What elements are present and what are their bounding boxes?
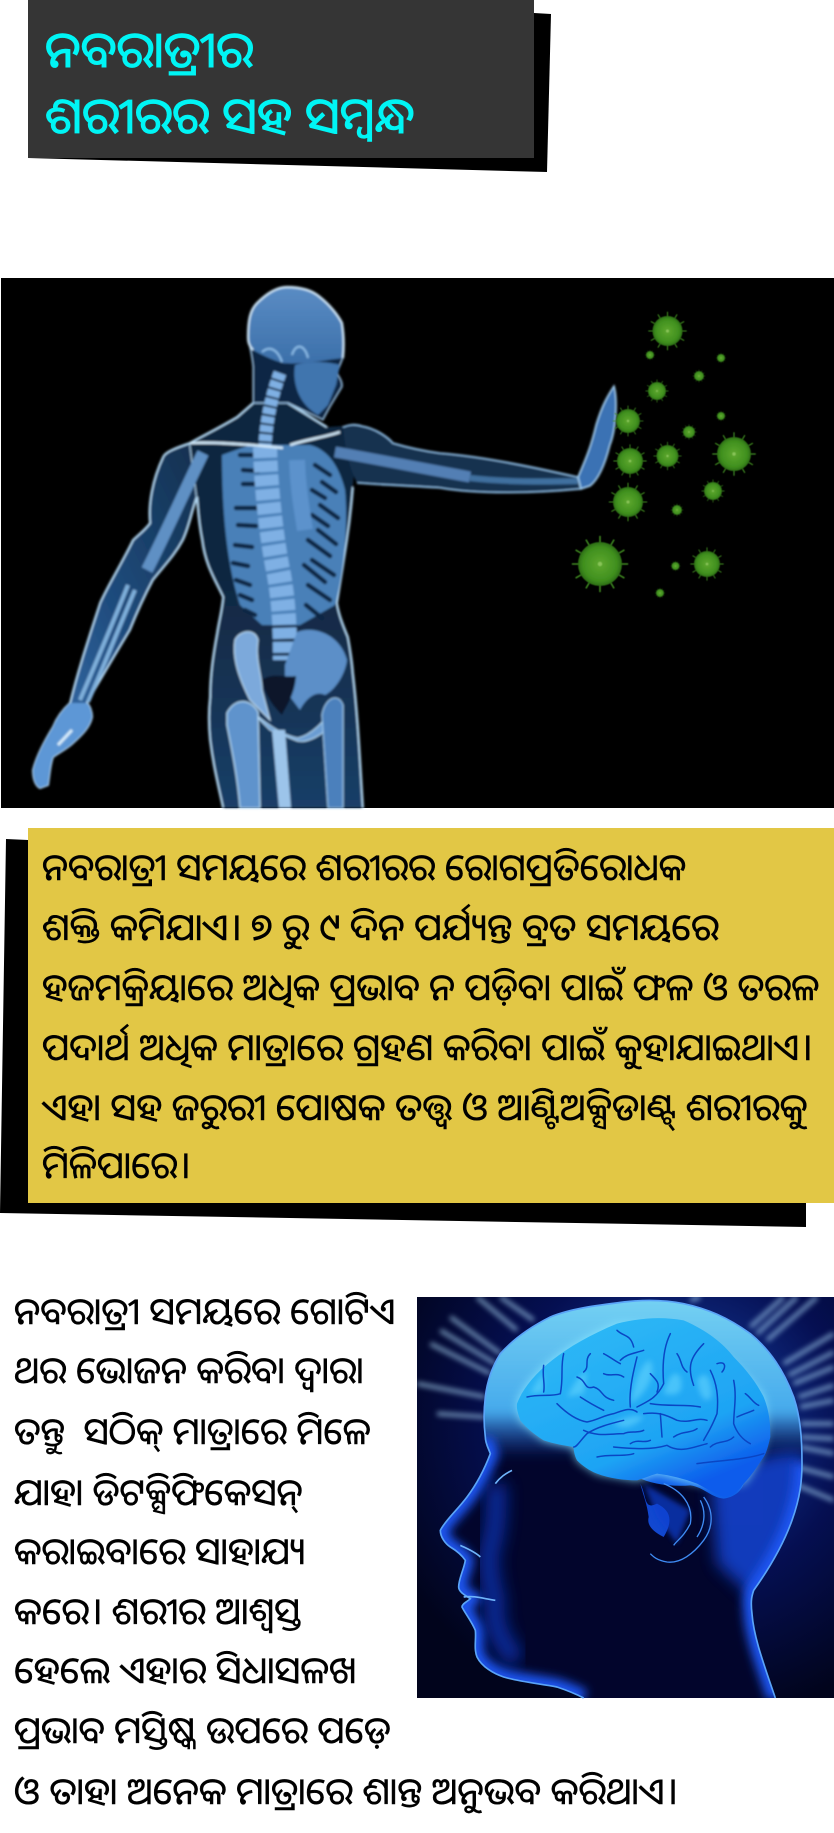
rib cage [222, 445, 346, 625]
body text with brain wrap: ଯାହା ଡିଟକ୍ସିଫିକେସନ୍ [14, 1466, 303, 1516]
viruses [572, 312, 756, 598]
panel text: ମିଳିପାରେ। [42, 1139, 190, 1189]
brain [517, 1318, 770, 1497]
body text with brain wrap: ହେଲେ ଏହାର ସିଧାସଳଖ [14, 1643, 357, 1694]
right arm outline [343, 425, 581, 493]
raised hand [578, 386, 616, 489]
lip and eye lines [460, 1470, 512, 1600]
title text [45, 14, 415, 148]
panel text: ପଦାର୍ଥ ଅଧିକ ମାତ୍ରାରେ ଗ୍ରହଣ କରିବା ପାଇଁ କୁହାଯାଇଥାଏ। [42, 1021, 812, 1071]
panel: yellow text callout [0, 828, 834, 1227]
title banner background [28, 0, 534, 158]
cheek glow [489, 1484, 517, 1660]
body text with brain wrap: ତନ୍ତୁ ସଠିକ୍ ମାତ୍ରାରେ ମିଳେ [14, 1405, 371, 1455]
torso outline [190, 403, 363, 808]
left hand [33, 703, 92, 788]
torso and legs [190, 367, 363, 808]
illustration: glowing brain in head profile [417, 1284, 834, 1698]
brain folds [527, 1330, 764, 1464]
title text: ନବରାତ୍ରୀର [45, 14, 253, 82]
light rays [417, 1297, 834, 1500]
skull dome glow [484, 1301, 801, 1458]
head silhouette [440, 1300, 803, 1699]
left arm [33, 443, 197, 788]
brain halo [517, 1323, 766, 1484]
panel background [28, 828, 834, 1203]
human figure [33, 287, 616, 808]
panel text: ଶକ୍ତି କମିଯାଏ। ୭ ରୁ ୯ ଦିନ ପର୍ଯ୍ୟନ୍ତ ବ୍ରତ ସମୟରେ [42, 900, 719, 951]
right arm bones [335, 452, 470, 477]
illustration: translucent human body blocking viruses [1, 278, 834, 808]
head [248, 287, 344, 420]
right arm [343, 425, 581, 493]
body text with brain wrap: ନବରାତ୍ରୀ ସମୟରେ ଗୋଟିଏ [14, 1285, 395, 1335]
title banner [28, 0, 551, 172]
body text with brain wrap [14, 1285, 678, 1815]
left arm bones [147, 453, 203, 570]
collarbones [190, 432, 340, 448]
pelvis [234, 630, 347, 741]
brain highlights [530, 1360, 712, 1427]
leg bones [227, 698, 343, 808]
panel text: ଏହା ସହ ଜରୁରୀ ପୋଷକ ତତ୍ତ୍ୱ ଓ ଆଣ୍ଟିଅକ୍ସିଡାଣ୍ଟ୍ ଶରୀରକୁ [41, 1080, 808, 1131]
inner edge glow [440, 1437, 802, 1698]
spine [265, 373, 305, 660]
rear head glow [710, 1452, 807, 1607]
panel text [41, 841, 819, 1189]
panel text: ହଜମକ୍ରିୟାରେ ଅଧିକ ପ୍ରଭାବ ନ ପଡ଼ିବା ପାଇଁ ଫଳ ଓ ତରଳ [42, 961, 819, 1011]
body text with brain wrap: ଓ ତାହା ଅନେକ ମାତ୍ରାରେ ଶାନ୍ତ ଅନୁଭବ କରିଥାଏ। [14, 1764, 678, 1815]
body text with brain wrap: ପ୍ରଭାବ ମସ୍ତିଷ୍କ ଉପରେ ପଡ଼େ [14, 1704, 391, 1754]
panel text: ନବରାତ୍ରୀ ସମୟରେ ଶରୀରର ରୋଗପ୍ରତିରୋଧକ [42, 841, 686, 891]
title text: ଶରୀରର ସହ ସମ୍ବନ୍ଧ [45, 80, 415, 148]
title banner shadow [28, 13, 551, 172]
panel shadow [0, 839, 806, 1227]
body text with brain wrap: କରେ। ଶରୀର ଆଶ୍ୱସ୍ତ [14, 1584, 301, 1635]
head outline [440, 1300, 802, 1698]
body text with brain wrap: ଥର ଭୋଜନ କରିବା ଦ୍ୱାରା [14, 1344, 364, 1394]
cerebellum and brain stem [637, 1468, 744, 1562]
body text with brain wrap: କରାଇବାରେ ସାହାଯ୍ୟ [14, 1525, 306, 1575]
